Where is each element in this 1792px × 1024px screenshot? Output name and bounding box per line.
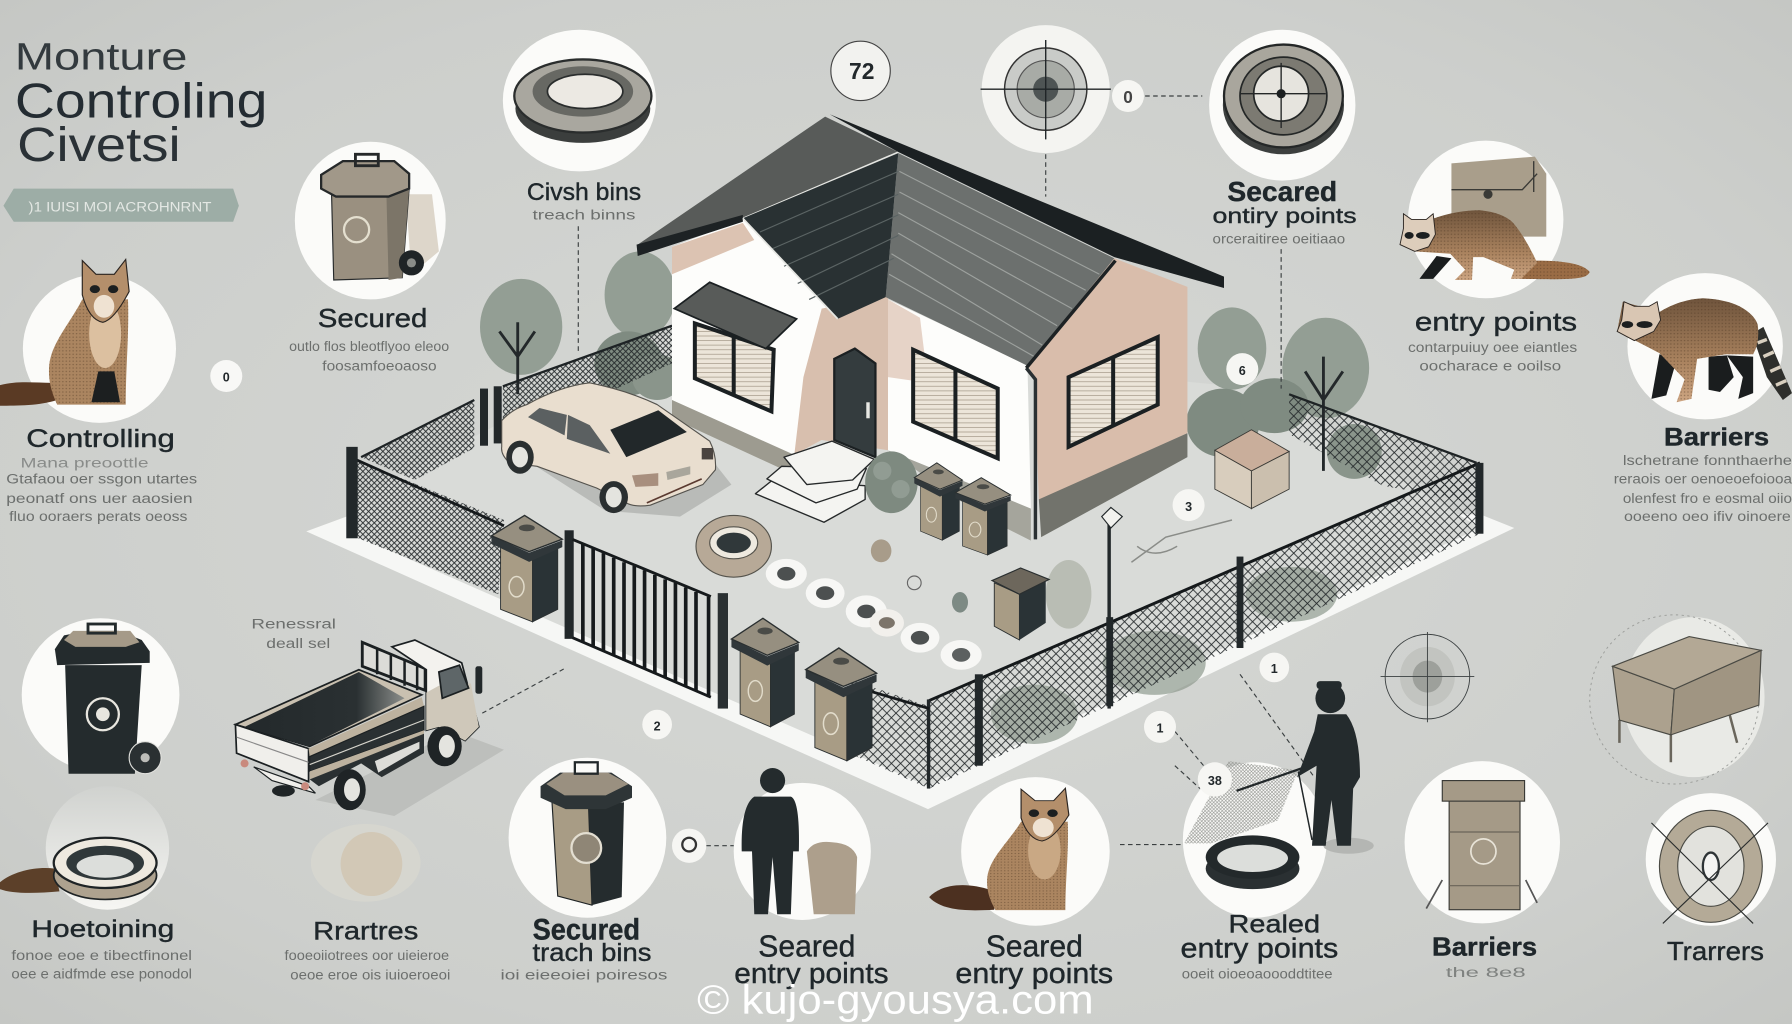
icon: pot [807, 842, 857, 914]
front wheel [427, 726, 462, 766]
panel: table barrier [1590, 615, 1765, 784]
icon: prowling civet [1400, 210, 1590, 280]
label: Civsh bins [527, 179, 641, 206]
left wing wall [672, 219, 840, 455]
roof hip left [638, 117, 898, 254]
label: Rrartres [313, 917, 418, 945]
gate [565, 530, 728, 709]
title [15, 36, 267, 172]
badge [1173, 489, 1205, 521]
label: Seared [758, 929, 855, 964]
icon: ring lid [514, 59, 651, 143]
front right fence [927, 463, 1483, 789]
roof right slope [886, 153, 1114, 366]
description: lschetrane fonnthaerhe [1623, 453, 1792, 468]
sub label: entry points [1181, 933, 1338, 964]
house bins [914, 463, 1011, 555]
description [289, 339, 450, 373]
truck caption: Renessral [251, 617, 336, 632]
description: Mana preoottle [21, 455, 149, 470]
back fence and trees [361, 251, 1477, 503]
description: fluo ooraers perats oeoss [9, 509, 188, 524]
bush by door [865, 451, 918, 513]
label: entry points [1415, 306, 1577, 336]
description: contarpuiuy oee eiantles [1408, 340, 1577, 355]
target icon [981, 25, 1111, 153]
roof ridge band [830, 114, 1224, 288]
person with net [1237, 681, 1374, 854]
truck caption: deall sel [266, 636, 330, 651]
dashed connectors [482, 96, 1314, 846]
icon: ring [1223, 45, 1344, 154]
badge [642, 710, 672, 739]
description [11, 948, 192, 981]
left window [695, 323, 774, 411]
cab [392, 640, 479, 741]
icon: sitting civet [0, 259, 129, 406]
label: Secared [1227, 176, 1337, 207]
badge zero: 0 [1123, 87, 1133, 107]
right window [1069, 337, 1158, 447]
label: Hoetoining [31, 916, 174, 943]
door [834, 349, 875, 457]
description: reraois oer oenoeoefoiooa [1614, 471, 1792, 486]
badge [1144, 711, 1176, 743]
sub label: treach binns [533, 207, 636, 222]
icon: sitting civet [987, 788, 1069, 910]
badge: 38 [1208, 774, 1222, 788]
sub label: ontiry points [1213, 203, 1357, 228]
panel: secured entry points ring [1209, 30, 1357, 246]
description: olenfest fro e eosmal oiio [1623, 491, 1792, 506]
description: foosamfoeoaoso [322, 358, 437, 373]
steps [755, 441, 874, 522]
label: Trarrers [1667, 936, 1764, 966]
badge [672, 829, 706, 863]
icon: ring [1206, 835, 1299, 889]
number badge [831, 41, 890, 101]
rear window [610, 410, 687, 457]
description [1408, 340, 1577, 373]
badge: 1 [1271, 662, 1278, 676]
badge: 1 [1156, 722, 1163, 736]
badge: 0 [223, 371, 230, 385]
badge [210, 360, 242, 392]
panel: civet two [929, 777, 1113, 990]
panel: sitting civet, controlling [0, 259, 197, 524]
icon: trash bin [321, 154, 439, 280]
sub label: entry points [734, 958, 889, 990]
badge [1226, 353, 1258, 385]
icon: person [742, 768, 799, 914]
title: Controling [15, 75, 267, 129]
badge: 3 [1185, 500, 1192, 514]
storage box [1215, 430, 1289, 509]
description: oocharace e ooilso [1419, 358, 1562, 373]
panel: civsh bins ring [503, 30, 656, 222]
icon: tail [929, 885, 994, 910]
panel: secured bin [289, 142, 450, 373]
panel: secured trash bins [501, 758, 668, 982]
panel: ring with tail [0, 786, 192, 981]
label: Barriers [1664, 424, 1769, 452]
hose [1131, 520, 1232, 562]
icon: two tone bin [541, 762, 632, 905]
icon: net [1184, 761, 1298, 843]
description: outlo flos bleotflyoo eleoo [289, 339, 450, 354]
label: Realed [1229, 911, 1320, 939]
platform rim [306, 514, 1514, 809]
car [502, 383, 731, 517]
subtitle pill: )1 IUISI MOI ACROHNRNT [29, 199, 212, 214]
right wall [1027, 258, 1187, 501]
badge [1259, 653, 1289, 682]
yard scene with house, fence, car and bins [306, 114, 1514, 809]
house [637, 114, 1224, 541]
icon: ring [54, 838, 157, 899]
ground ring [696, 515, 771, 577]
watermark: © kujo-gyousya.com [697, 977, 1094, 1023]
icon: cabinet [1426, 781, 1537, 910]
panel: trarrers ring [1646, 793, 1776, 966]
front gable roof [743, 153, 898, 319]
description: peonatf ons uer aaosien [6, 491, 193, 506]
panel: barriers cabinet [1405, 761, 1560, 980]
description: Gtafaou oer ssgon utartes [6, 471, 197, 486]
description: fonoe eoe e tibectfinonel [11, 948, 192, 963]
badge: 6 [1239, 364, 1246, 378]
ground [349, 331, 1480, 786]
description [1614, 453, 1792, 524]
downpipe [1026, 368, 1035, 539]
label: Secured [533, 913, 640, 946]
truck shadow [315, 731, 504, 816]
description: oee e aidfmde ese ponodol [11, 966, 192, 981]
front left fence [346, 447, 929, 789]
icon: raccoon [1617, 298, 1792, 402]
lamp post [1102, 507, 1122, 709]
stepping discs [766, 539, 982, 670]
description: the 8e8 [1446, 965, 1526, 980]
side windows [528, 408, 567, 435]
label: Barriers [1432, 931, 1537, 961]
icon: black wheelie bin [55, 624, 161, 774]
title: Civetsi [17, 119, 181, 172]
icon: crossed ring [1651, 810, 1768, 923]
description: orceraitiree oeitiaao [1213, 231, 1346, 246]
panel: faded device and rrartres [285, 824, 450, 982]
description [6, 455, 197, 524]
rear bumper [254, 767, 315, 793]
sub label: entry points [955, 958, 1113, 990]
headboard rack [362, 642, 425, 690]
panel: person with bin [734, 768, 889, 990]
panel: realed entry points [1181, 761, 1338, 981]
rear wheel [334, 769, 366, 810]
front bins [491, 515, 877, 761]
description [285, 948, 450, 982]
icon: box on legs [1613, 637, 1761, 762]
icon: faded device [341, 832, 402, 896]
description: oeoe eroe ois iuioeroeoi [290, 967, 450, 982]
badge zero [1112, 80, 1144, 112]
badge [1198, 762, 1232, 797]
label: Seared [986, 929, 1083, 964]
panel: barriers raccoon [1614, 273, 1792, 524]
icon: tail [0, 868, 59, 893]
description: ioi eieeoiei poiresos [501, 967, 668, 982]
centre window [913, 350, 998, 458]
foundation [1039, 433, 1187, 537]
panel: entry points raccoon [1400, 141, 1590, 373]
badge: 2 [654, 719, 661, 733]
small target [1381, 632, 1474, 722]
label: Controlling [26, 425, 175, 453]
description: ooeit oioeoaoooddtitee [1182, 966, 1333, 981]
description: ooeeno oeo ifiv oinoere [1624, 509, 1791, 524]
awning [674, 282, 797, 349]
number badge: 72 [849, 58, 874, 84]
panel: black bin [22, 618, 179, 774]
truck [235, 640, 504, 816]
open bin near fence [992, 560, 1091, 640]
car body [502, 383, 716, 506]
subtitle pill [3, 189, 239, 222]
label: Secured [318, 303, 427, 333]
entry niche [794, 295, 888, 455]
sub label: trach bins [533, 939, 651, 967]
description: fooeoiiotrees oor uieieroe [285, 948, 450, 963]
cargo bed [235, 670, 422, 746]
icon: box [1451, 157, 1546, 237]
truck caption [251, 617, 336, 651]
car shadow [536, 463, 731, 517]
centre wall [888, 299, 1031, 509]
title: Monture [15, 36, 187, 78]
